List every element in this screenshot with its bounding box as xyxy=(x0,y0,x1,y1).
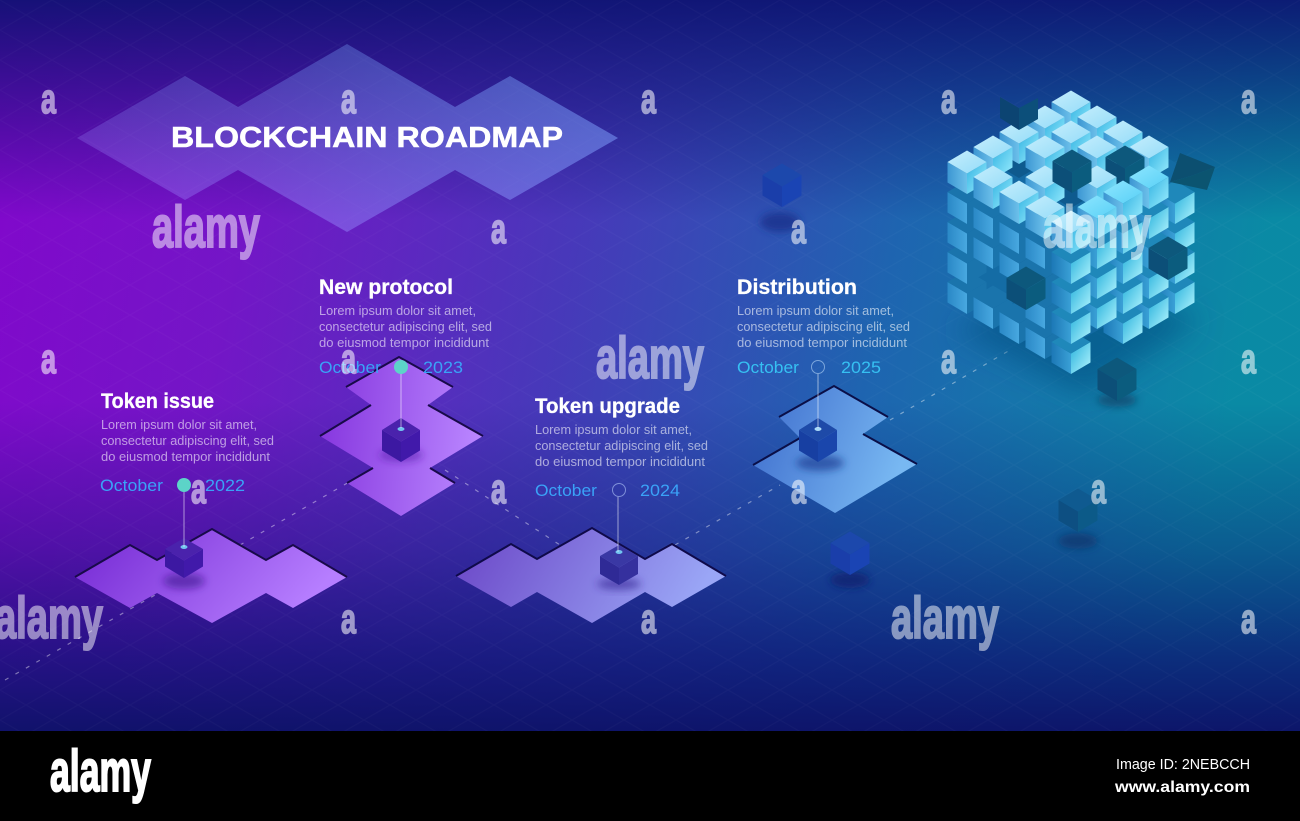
cube shadow xyxy=(796,455,844,471)
date: October xyxy=(737,358,799,377)
bottom layer xyxy=(948,270,1194,374)
watermark: small a marks: a xyxy=(1241,595,1256,642)
top layer xyxy=(948,90,1168,254)
date: 2023 xyxy=(423,358,463,377)
description: Lorem ipsum dolor sit amet, xyxy=(319,303,476,318)
watermark: small a marks: a xyxy=(191,465,206,512)
dark cube: left side xyxy=(1006,266,1046,310)
cube marker xyxy=(165,538,203,578)
date: October xyxy=(100,476,163,495)
image id: Image ID: 2NEBCCH xyxy=(1116,756,1250,773)
description: do eiusmod tempor incididunt xyxy=(101,449,270,464)
description: do eiusmod tempor incididunt xyxy=(737,335,907,350)
milestone: Token issue xyxy=(75,390,347,623)
dashed timeline xyxy=(5,350,1010,680)
watermark: alamy large: alamy xyxy=(596,326,704,391)
watermark: small a marks xyxy=(41,75,1256,642)
watermark: small a marks: a xyxy=(941,75,956,122)
watermark: alamy large: alamy xyxy=(1043,195,1151,260)
watermark: small a marks: a xyxy=(341,75,356,122)
platform: Token issue xyxy=(75,529,347,623)
watermark: small a marks: a xyxy=(941,335,956,382)
watermark: small a marks: a xyxy=(491,205,506,252)
cube cluster xyxy=(948,90,1215,395)
second layer xyxy=(948,180,1194,284)
dark cube: top notch xyxy=(1000,97,1038,130)
milestone: Token upgrade xyxy=(456,395,726,623)
cube marker xyxy=(799,418,837,462)
fourth layer xyxy=(948,240,1194,344)
watermark: small a marks: a xyxy=(341,335,356,382)
date: October xyxy=(319,358,381,377)
heading: Distribution xyxy=(737,276,857,299)
watermark: small a marks: a xyxy=(641,75,656,122)
date xyxy=(100,476,245,495)
description xyxy=(319,303,492,350)
date: 2022 xyxy=(205,476,245,495)
milestone: New protocol xyxy=(319,276,492,516)
heading: Token upgrade xyxy=(535,395,680,418)
description: consectetur adipiscing elit, sed xyxy=(737,319,910,334)
connector xyxy=(400,372,402,428)
watermark: small a marks: a xyxy=(1241,335,1256,382)
description xyxy=(535,422,708,469)
watermark: alamy large: alamy xyxy=(891,586,999,651)
platform: Distribution xyxy=(753,386,917,513)
date xyxy=(535,481,680,500)
dark cube: below cluster xyxy=(1097,358,1137,407)
watermark: small a marks: a xyxy=(41,335,56,382)
watermark: small a marks: a xyxy=(1091,465,1106,512)
watermark: alamy large xyxy=(0,195,1151,651)
cube shadow xyxy=(379,448,423,462)
description: do eiusmod tempor incididunt xyxy=(535,454,705,469)
heading: New protocol xyxy=(319,276,453,299)
watermark: small a marks: a xyxy=(491,465,506,512)
description: Lorem ipsum dolor sit amet, xyxy=(737,303,894,318)
dark cube: tilted xyxy=(1170,153,1215,190)
date xyxy=(319,358,463,377)
description: consectetur adipiscing elit, sed xyxy=(319,319,492,334)
watermark: small a marks: a xyxy=(1241,75,1256,122)
watermark: small a marks: a xyxy=(641,595,656,642)
description xyxy=(101,417,274,464)
floating cube: upper xyxy=(760,164,802,232)
footer bar xyxy=(0,731,1300,821)
connector xyxy=(617,497,619,552)
watermark: alamy large: alamy xyxy=(152,195,260,260)
floating cube: lower right xyxy=(1058,488,1098,549)
third layer xyxy=(948,210,1194,314)
watermark: small a marks: a xyxy=(791,205,806,252)
connector xyxy=(817,374,819,428)
cube marker xyxy=(600,545,638,585)
platform: New protocol xyxy=(320,357,483,516)
heading: Token issue xyxy=(101,390,214,413)
connector xyxy=(183,490,185,547)
milestone: Distribution xyxy=(737,276,917,513)
platform: Token upgrade xyxy=(456,528,726,623)
description: Lorem ipsum dolor sit amet, xyxy=(535,422,692,437)
date xyxy=(737,358,881,377)
date: 2024 xyxy=(640,481,680,500)
footer logo: alamy xyxy=(50,739,151,804)
watermark: small a marks: a xyxy=(791,465,806,512)
description: consectetur adipiscing elit, sed xyxy=(101,433,274,448)
description: do eiusmod tempor incididunt xyxy=(319,335,489,350)
title text: BLOCKCHAIN ROADMAP xyxy=(171,122,563,154)
dark cube: centre raised xyxy=(1052,150,1092,193)
cube marker xyxy=(382,418,420,462)
watermark: small a marks: a xyxy=(41,75,56,122)
watermark: small a marks: a xyxy=(341,595,356,642)
date: 2025 xyxy=(841,358,881,377)
dark cube: right side xyxy=(1148,236,1188,280)
cube shadow xyxy=(597,578,641,590)
description: consectetur adipiscing elit, sed xyxy=(535,438,708,453)
title banner xyxy=(77,44,618,232)
floating cube: lower centre xyxy=(830,532,870,588)
date: October xyxy=(535,481,597,500)
cube shadow xyxy=(163,573,205,589)
site url: www.alamy.com xyxy=(1114,779,1250,796)
description xyxy=(737,303,910,350)
description: Lorem ipsum dolor sit amet, xyxy=(101,417,257,432)
